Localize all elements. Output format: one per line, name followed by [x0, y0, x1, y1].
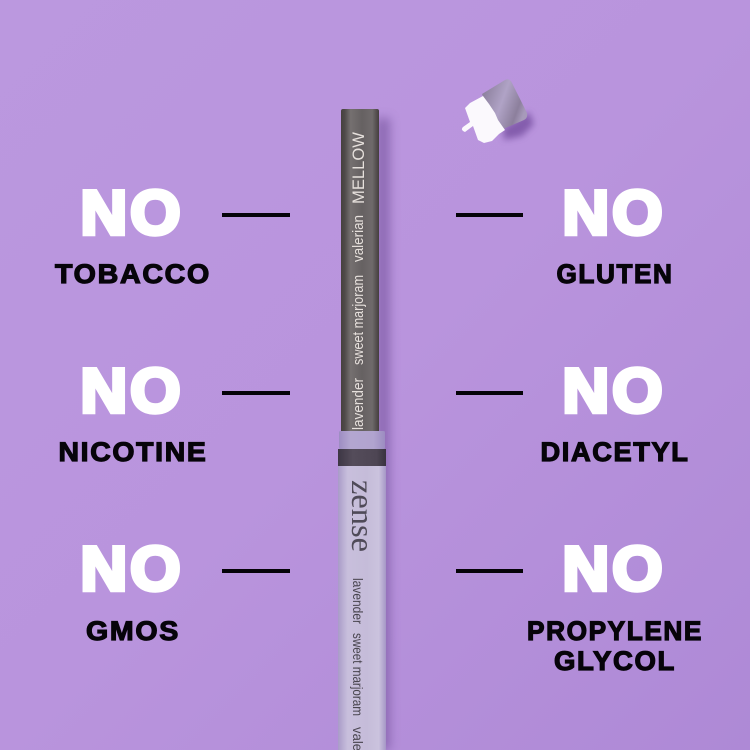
item: no propylene glycol: [527, 535, 703, 676]
item: no nicotine: NO: [80, 357, 184, 426]
item: no diacetyl: [540, 357, 690, 467]
pen dark band: [338, 449, 386, 466]
body text: sweet marjoram: sweet marjoram: [350, 633, 366, 716]
item: no tobacco: TOBACCO: [55, 259, 211, 289]
barrel text: MELLOW: MELLOW: [349, 132, 368, 204]
barrel text: sweet marjoram: sweet marjoram: [351, 275, 367, 365]
pen lower lavender body: [338, 449, 386, 750]
item: no nicotine: [58, 357, 208, 467]
item: no gluten: [556, 179, 674, 289]
item: no propylene glycol: NO: [562, 535, 666, 604]
body text: lavender: lavender: [350, 578, 366, 624]
barrel text: valerian: valerian: [351, 215, 367, 262]
item: no diacetyl: NO: [562, 357, 666, 426]
item: no gluten: NO: [562, 179, 666, 248]
vape pen: [338, 109, 390, 750]
item: no propylene glycol: PROPYLENE: [527, 616, 703, 646]
barrel text: lavender: lavender: [351, 378, 367, 430]
pen collar: [339, 431, 385, 449]
cap white tip: [462, 96, 505, 143]
item: no diacetyl: DIACETYL: [540, 437, 690, 467]
item: no tobacco: NO: [80, 179, 184, 248]
logo: zense: zense: [345, 480, 381, 552]
item: no gmos: GMOS: [86, 616, 180, 646]
item: no gluten: GLUTEN: [556, 259, 674, 289]
pen cap: [462, 79, 534, 143]
item: no propylene glycol: GLYCOL: [554, 646, 676, 676]
item: no tobacco: [55, 179, 211, 289]
item: no gmos: [80, 535, 184, 646]
item: no nicotine: NICOTINE: [58, 437, 208, 467]
connector lines: [222, 213, 523, 573]
item: no gmos: NO: [80, 535, 184, 604]
pen upper dark barrel: [341, 109, 379, 434]
cap metal sleeve: [482, 79, 527, 129]
